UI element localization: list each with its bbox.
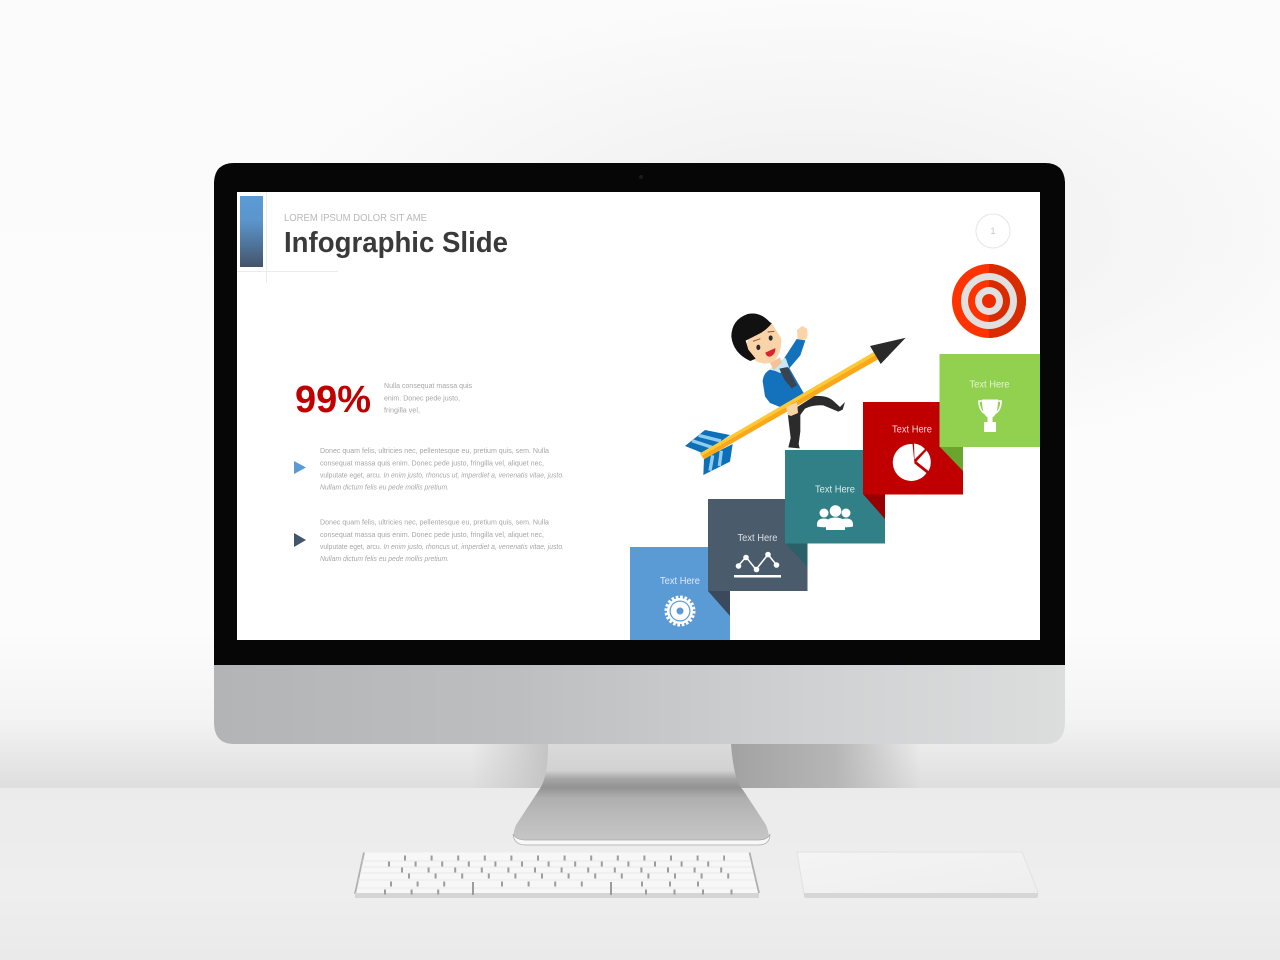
- paragraph one: Donec quam felis, ultricies nec, pellentesque eu, pretium quis, sem. Nulla: [320, 446, 550, 455]
- paragraph one: Nullam dictum felis eu pede mollis pretium.: [320, 482, 449, 492]
- character hair: [731, 313, 772, 361]
- subtitle: LOREM IPSUM DOLOR SIT AME: [284, 212, 427, 224]
- keyboard: [355, 852, 759, 898]
- keyboard key gaps: [384, 858, 735, 895]
- monitor chin: [214, 660, 1065, 744]
- header guide lines: [237, 192, 338, 283]
- character tie: [779, 367, 797, 388]
- monitor stand: [513, 744, 770, 845]
- step 3: teal team: [785, 450, 885, 544]
- paragraph two: Nullam dictum felis eu pede mollis pretium.: [320, 554, 449, 563]
- bullet arrow slate: [294, 533, 306, 547]
- bullet arrow blue: [294, 461, 306, 474]
- page number badge: [976, 214, 1010, 248]
- character torso: [763, 366, 805, 410]
- step 2: slate line chart: Text Here: [738, 533, 778, 544]
- trackpad: [797, 852, 1038, 898]
- arrow fletching: [685, 430, 733, 475]
- header accent bar: [240, 196, 263, 267]
- arrow head: [870, 338, 906, 364]
- step 3: teal team: Text Here: [815, 484, 855, 496]
- paragraph two: consequat massa quis enim. Donec pede justo, fringilla vel, aliquet nec,: [320, 530, 544, 539]
- page number badge: 1: [990, 226, 996, 236]
- icon: trophy: [979, 400, 1001, 432]
- paragraph one: [320, 446, 564, 492]
- paragraph two: vulputate eget, arcu. In enim justo, rhoncus ut, imperdiet a, venenatis vitae, justo.: [320, 542, 564, 551]
- character neck: [770, 357, 782, 370]
- paragraph two: Donec quam felis, ultricies nec, pellentesque eu, pretium quis, sem. Nulla: [320, 518, 550, 526]
- icon: line chart: [734, 552, 781, 578]
- target: [952, 264, 1026, 338]
- step 4: red pie: [863, 402, 963, 494]
- character collar: [770, 358, 789, 373]
- step 2: slate line chart: [708, 499, 808, 591]
- step 5: green trophy: [940, 354, 1040, 447]
- character gripping hand: [786, 402, 798, 416]
- title: Infographic Slide: [284, 227, 508, 259]
- arrow shaft: [700, 352, 878, 459]
- character: [731, 313, 845, 448]
- monitor black bezel: [214, 163, 1065, 665]
- step 5: green trophy: Text Here: [970, 380, 1010, 390]
- character back leg: [788, 412, 800, 448]
- webcam: [639, 175, 643, 179]
- step 4: red pie: Text Here: [892, 424, 932, 436]
- statistic description: enim. Donec pede justo,: [384, 394, 460, 402]
- icon: people: [817, 505, 853, 530]
- character mouth: [765, 348, 775, 357]
- statistic description: Nulla consequat massa quis: [384, 381, 472, 390]
- character raised arm: [784, 339, 805, 369]
- character brows and eyes: [753, 331, 774, 350]
- character hand: [797, 326, 808, 340]
- statistic description: [384, 381, 472, 414]
- character face: [744, 322, 781, 363]
- step 1: blue gear: [630, 547, 730, 640]
- slide screen: [237, 192, 1040, 640]
- icon: pie chart: [893, 444, 931, 481]
- paragraph one: vulputate eget, arcu. In enim justo, rhoncus ut, imperdiet a, venenatis vitae, justo.: [320, 470, 564, 480]
- statistic description: fringilla vel,: [384, 406, 420, 414]
- character front leg: [796, 396, 845, 415]
- step 1: blue gear: Text Here: [660, 576, 700, 587]
- paragraph one: consequat massa quis enim. Donec pede justo, fringilla vel, aliquet nec,: [320, 458, 544, 468]
- icon: gear: [666, 597, 694, 625]
- statistic 99%: 99%: [295, 379, 371, 421]
- paragraph two: [320, 518, 564, 563]
